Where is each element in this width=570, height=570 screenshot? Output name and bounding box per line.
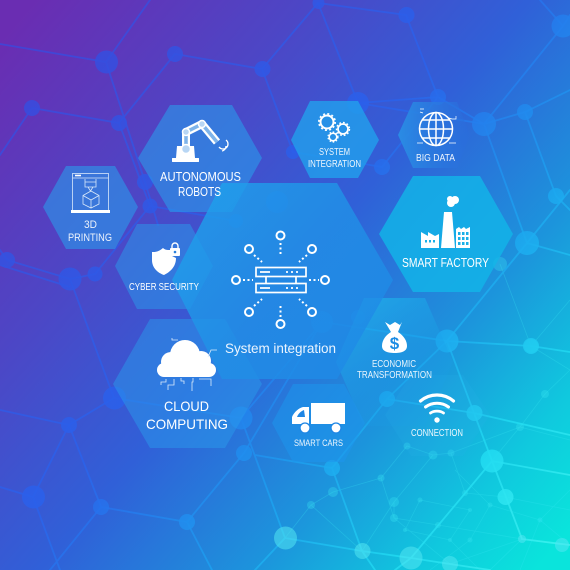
- text: autonomous robots: AUTONOMOUS: [160, 170, 241, 184]
- icon: gears: [319, 114, 350, 142]
- text: system integration: [308, 147, 361, 170]
- panel: smart factory hexagon: [379, 176, 513, 292]
- dotted connectors: [243, 243, 319, 317]
- text: 3D printing: PRINTING: [68, 232, 112, 244]
- text: smart cars: SMART CARS: [294, 438, 343, 449]
- background network: bright lower nodes: [274, 526, 569, 570]
- panel: 3D printing hexagon: [43, 166, 138, 249]
- icon: cloud with circuits: [157, 338, 217, 391]
- panel: system integration hexagon: [291, 101, 379, 178]
- text: smart factory: SMART FACTORY: [402, 255, 489, 270]
- icon: factory: [421, 196, 470, 248]
- panel: autonomous robots hexagon: [138, 105, 262, 212]
- text: economic transformation: TRANSFORMATION: [357, 370, 432, 381]
- icon: money bag: [382, 322, 407, 353]
- text: big data: BIG DATA: [416, 152, 455, 164]
- icon: money bag: $: [390, 334, 400, 353]
- icon: truck: [292, 403, 345, 433]
- panel: connection hexagon: [385, 375, 490, 456]
- panel: cloud computing hexagon: [113, 319, 262, 448]
- icon: central server network: [232, 232, 329, 328]
- text: 3D printing: 3D: [84, 219, 97, 231]
- text: cloud computing: CLOUD: [164, 398, 209, 414]
- panel: big data hexagon: [398, 102, 470, 168]
- panel: smart cars hexagon: [272, 384, 365, 462]
- icon: wifi: [420, 395, 454, 423]
- node rings: [232, 232, 329, 328]
- text: 3D printing: [68, 219, 112, 244]
- server rack: [256, 268, 306, 292]
- text: cloud computing: [146, 398, 228, 432]
- background network: fine mesh: [285, 264, 570, 570]
- text: economic transformation: [357, 359, 432, 381]
- text: connection: CONNECTION: [411, 428, 463, 439]
- icon: robot arm: [172, 120, 228, 162]
- panel: cyber security hexagon: [115, 224, 213, 309]
- text: cloud computing: COMPUTING: [146, 416, 228, 432]
- panel: central hexagon: [172, 183, 393, 379]
- text: system integration: INTEGRATION: [308, 159, 361, 170]
- icon: shield with lock: [152, 243, 180, 275]
- text: autonomous robots: ROBOTS: [178, 185, 221, 199]
- icon: 3D printer: [71, 174, 110, 213]
- text: cyber security: CYBER SECURITY: [129, 282, 199, 293]
- text: economic transformation: ECONOMIC: [372, 359, 416, 370]
- panel: economic transformation hexagon: [336, 298, 453, 426]
- text: system integration: SYSTEM: [319, 147, 350, 158]
- icon: globe: [417, 109, 456, 146]
- background network: fine mesh nodes: [307, 257, 549, 542]
- text: system integration caption: System integration: [225, 341, 336, 356]
- text: autonomous robots: [160, 170, 241, 199]
